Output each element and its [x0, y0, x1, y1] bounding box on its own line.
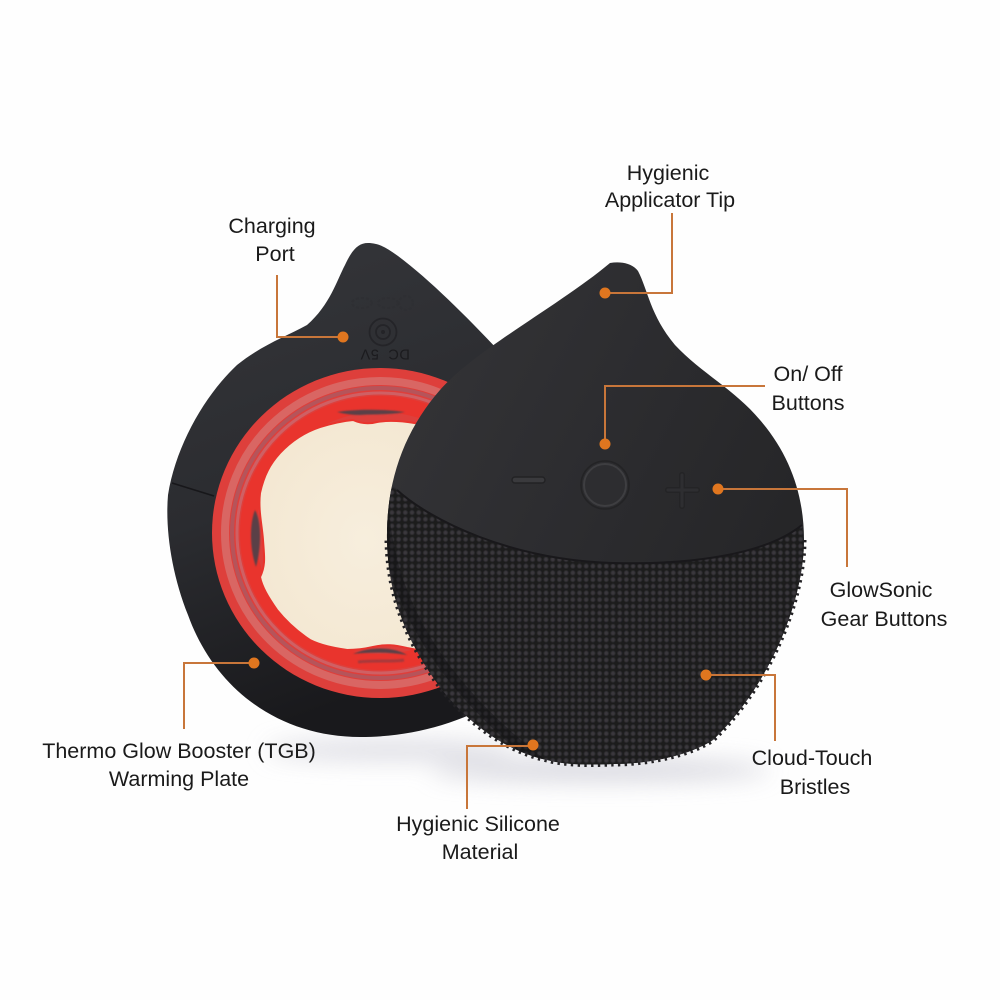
- ground shadow: [265, 740, 770, 781]
- callout: applicator tip: [600, 161, 735, 298]
- callout: silicone material: [396, 740, 560, 864]
- callout: on/off buttons: Buttons: [772, 391, 844, 415]
- warming plate: [259, 420, 470, 660]
- front body: [387, 262, 804, 765]
- callout: charging port: Charging: [228, 214, 316, 238]
- minus button: [512, 477, 545, 483]
- callout: charging port: Port: [255, 242, 295, 266]
- device: front view with bristles: [380, 262, 820, 780]
- embossed marks: [352, 296, 413, 310]
- device: back view with warming plate: [167, 243, 548, 737]
- callout: bristles: [700, 670, 872, 799]
- callout: bristles: Bristles: [780, 775, 850, 799]
- body seam: [172, 483, 214, 496]
- callout: silicone material: Material: [442, 840, 518, 864]
- callout: charging port: [228, 214, 348, 342]
- callout: applicator tip: Hygienic: [627, 161, 709, 185]
- callout: on/off buttons: On/ Off: [774, 362, 842, 386]
- charging port: [370, 318, 396, 346]
- back body: [167, 243, 500, 737]
- bristle field: [386, 486, 804, 764]
- power button: [581, 461, 629, 509]
- callout: gear buttons: [712, 484, 947, 631]
- callout: silicone material: Hygienic Silicone: [396, 812, 560, 836]
- callout: gear buttons: Gear Buttons: [821, 607, 947, 631]
- callout: warming plate: Warming Plate: [109, 767, 249, 791]
- callout: warming plate: Thermo Glow Booster (TGB): [42, 739, 316, 763]
- callout: warming plate: [42, 658, 316, 791]
- plate clips: [251, 410, 407, 662]
- callout: on/off buttons: [600, 362, 844, 450]
- bristle tips along the edge: [387, 540, 804, 765]
- callout: applicator tip: Applicator Tip: [605, 188, 735, 212]
- callout: bristles: Cloud-Touch: [752, 746, 872, 770]
- red ring: [212, 368, 548, 698]
- callout: gear buttons: GlowSonic: [830, 578, 933, 602]
- plus button: [668, 475, 697, 506]
- DC 5V embossed label: DC 5V: [360, 346, 410, 362]
